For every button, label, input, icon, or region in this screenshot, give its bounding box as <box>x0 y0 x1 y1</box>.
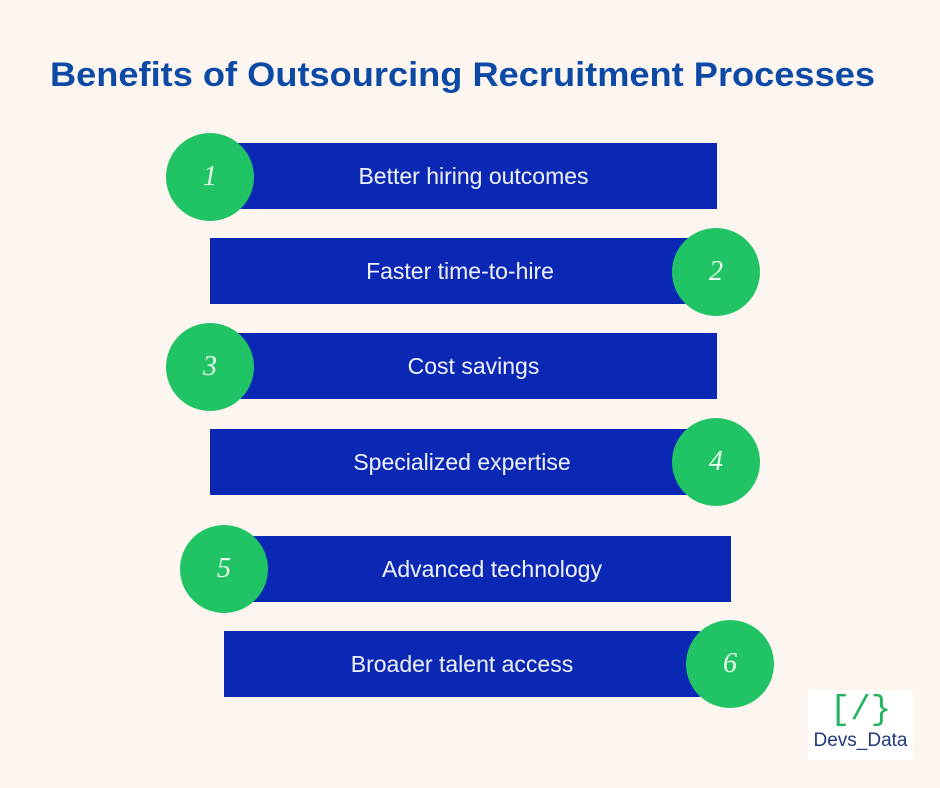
item 3 circle <box>166 323 254 411</box>
logo <box>808 690 913 760</box>
item 1 bar <box>230 143 717 209</box>
item 2 circle <box>672 228 760 316</box>
item 2 circle: 2 <box>709 256 723 287</box>
item 2 bar: Faster time-to-hire <box>366 258 554 284</box>
logo: [/} <box>830 692 891 730</box>
item 4 bar: Specialized expertise <box>353 448 571 474</box>
item 3 bar: Cost savings <box>408 352 539 378</box>
item 3 circle: 3 <box>203 351 217 382</box>
item 6 circle <box>686 620 774 708</box>
item 6 bar: Broader talent access <box>351 650 573 676</box>
item 6 circle: 6 <box>723 648 737 679</box>
item 3 bar <box>230 333 717 399</box>
item 6 bar <box>224 631 700 697</box>
item 5 bar <box>245 536 731 602</box>
item 1 circle <box>166 133 254 221</box>
item 2 bar <box>210 238 710 304</box>
item 4 circle: 4 <box>709 446 723 477</box>
logo: Devs_Data <box>814 730 908 751</box>
item 1 bar: Better hiring outcomes <box>358 162 589 188</box>
item 5 circle <box>180 525 268 613</box>
item 1 circle: 1 <box>203 161 217 192</box>
title: Benefits of Outsourcing Recruitment Processes <box>50 56 875 94</box>
item 4 bar <box>210 429 714 495</box>
item 5 circle: 5 <box>217 553 231 584</box>
item 4 circle <box>672 418 760 506</box>
item 5 bar: Advanced technology <box>382 556 602 582</box>
